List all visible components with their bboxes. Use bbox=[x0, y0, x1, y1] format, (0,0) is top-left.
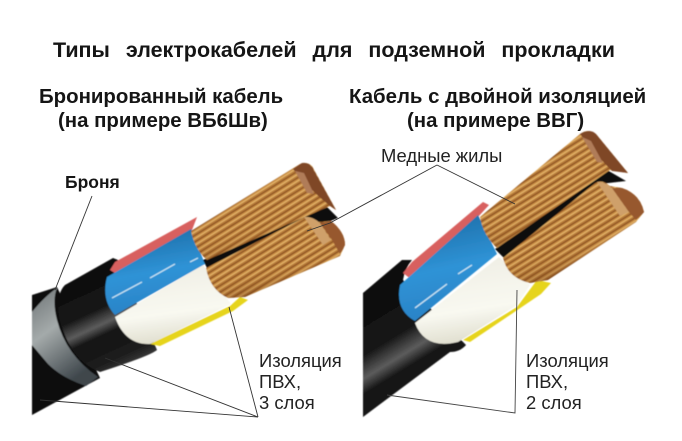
heading: armored cable: (на примере ВБ6Шв) bbox=[58, 110, 268, 132]
copper core upper end face bbox=[580, 131, 628, 173]
white core bbox=[415, 257, 530, 344]
label: armor: Броня bbox=[65, 172, 120, 192]
yellow stripe bbox=[150, 297, 248, 346]
outer sheath bbox=[32, 287, 100, 415]
outer sheath bbox=[363, 260, 466, 417]
blue core bbox=[399, 215, 497, 321]
label: PVC insulation, 3 layers: ПВХ, bbox=[259, 371, 301, 392]
label: PVC insulation, 3 layers: 3 слоя bbox=[259, 392, 315, 413]
copper core lower end face bbox=[304, 217, 331, 245]
leader lines: PVC insulation, 2 layers bbox=[387, 290, 517, 413]
leader lines: copper cores bbox=[307, 165, 515, 231]
title: Типы электрокабелей для подземной прокладки bbox=[53, 38, 615, 62]
heading: double insulated cable: (на примере ВВГ) bbox=[407, 110, 584, 132]
red core bbox=[110, 217, 197, 275]
label: PVC insulation, 2 layers: ПВХ, bbox=[526, 371, 568, 392]
copper core upper end face bbox=[293, 163, 336, 210]
cable: armored bbox=[32, 163, 345, 415]
red core bbox=[403, 202, 489, 280]
black gap bbox=[203, 205, 338, 270]
label: PVC insulation, 2 layers: 2 слоя bbox=[526, 392, 582, 413]
cable: double insulated bbox=[363, 131, 644, 417]
copper core lower bbox=[503, 182, 644, 283]
label: PVC insulation, 3 layers bbox=[259, 350, 342, 413]
label: PVC insulation, 2 layers bbox=[526, 350, 609, 413]
copper core upper bbox=[191, 163, 336, 260]
copper core lower bbox=[206, 217, 345, 298]
inner sheath bbox=[58, 258, 157, 372]
label: copper cores: Медные жилы bbox=[381, 145, 502, 166]
blue core bbox=[105, 229, 205, 315]
black gap bbox=[495, 170, 626, 258]
leader line: armor bbox=[55, 196, 92, 290]
label: PVC insulation, 2 layers: Изоляция bbox=[526, 350, 609, 371]
label: PVC insulation, 3 layers: Изоляция bbox=[259, 350, 342, 371]
copper core lower end face bbox=[597, 182, 629, 216]
heading: double insulated cable: Кабель с двойной изоляцией bbox=[349, 86, 646, 108]
heading: double insulated cable bbox=[349, 86, 646, 132]
heading: armored cable bbox=[39, 86, 283, 132]
armor layer bbox=[32, 288, 98, 386]
copper core upper bbox=[480, 131, 628, 248]
white core bbox=[115, 265, 231, 344]
heading: armored cable: Бронированный кабель bbox=[39, 86, 283, 108]
leader lines: PVC insulation, 3 layers bbox=[40, 307, 258, 417]
yellow stripe bbox=[463, 280, 551, 342]
